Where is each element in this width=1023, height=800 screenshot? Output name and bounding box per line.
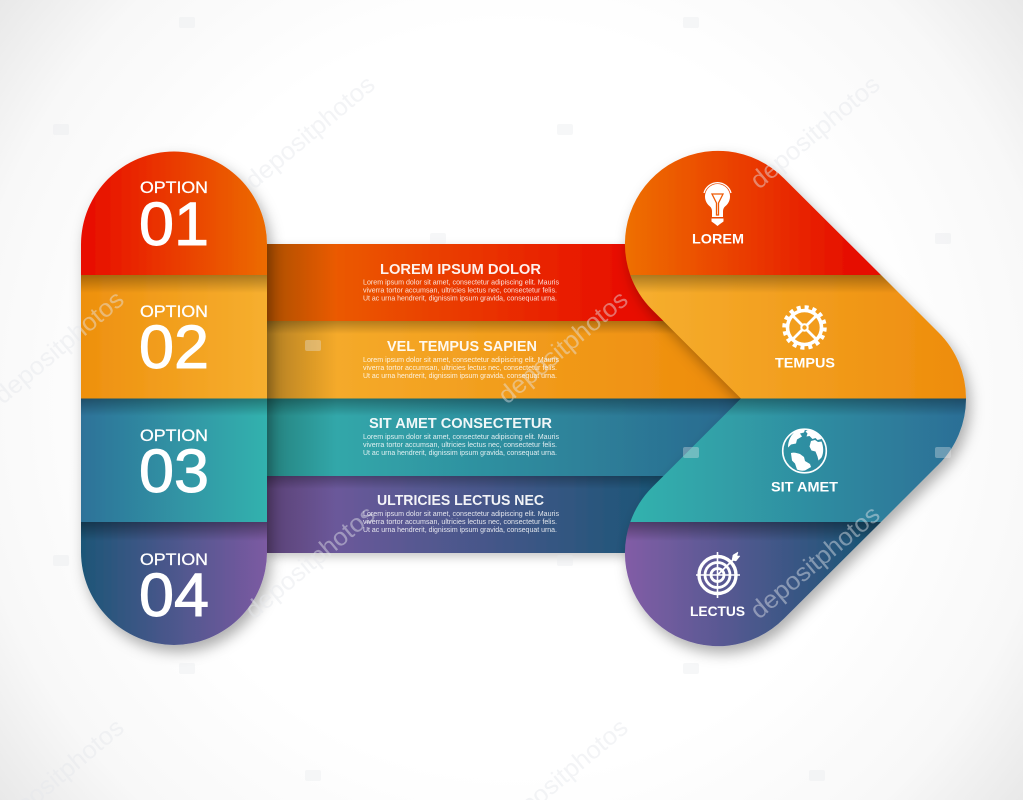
block 1 text: viverra tortor accumsan, ultricies lectus nec, consectetur felis.	[363, 288, 557, 294]
band shading	[267, 244, 757, 553]
pill shading	[81, 275, 267, 541]
block 2 text: viverra tortor accumsan, ultricies lectus nec, consectetur felis.	[363, 365, 557, 372]
panel: centre text bands	[267, 244, 757, 553]
block 3 text: SIT AMET CONSECTETUR	[369, 416, 553, 432]
block 3 text	[363, 416, 560, 457]
label tempus: TEMPUS	[775, 354, 835, 370]
icon: globe	[783, 429, 826, 473]
block 1 text	[363, 262, 560, 302]
block 4 text	[363, 493, 560, 534]
block 4 text: viverra tortor accumsan, ultricies lectus nec, consectetur felis.	[363, 519, 557, 526]
label lorem: LOREM	[692, 230, 744, 246]
arrow head segments	[625, 151, 966, 646]
watermarks: depositphotos	[240, 70, 380, 195]
panel: option pill	[81, 152, 267, 645]
block 3 text: viverra tortor accumsan, ultricies lectus nec, consectetur felis.	[363, 442, 557, 449]
option 02 label: 02	[139, 313, 209, 381]
block 3 text: Lorem ipsum dolor sit amet, consectetur adipiscing elit. Mauris	[363, 434, 560, 441]
block 1 text: LOREM IPSUM DOLOR	[380, 262, 542, 278]
block 4 text: Lorem ipsum dolor sit amet, consectetur adipiscing elit. Mauris	[363, 511, 560, 518]
block 4 text: Ut ac urna hendrerit, dignissim ipsum gravida, consequat urna.	[363, 527, 557, 534]
option 02 label: OPTION	[140, 303, 208, 321]
icon: target	[696, 552, 740, 598]
option 01 label: OPTION	[140, 179, 208, 197]
pill segments	[81, 152, 267, 645]
block 2 text: VEL TEMPUS SAPIEN	[387, 339, 537, 355]
block 2 text	[363, 339, 560, 380]
option 03 label: OPTION	[140, 427, 208, 445]
panel: arrow head	[620, 151, 970, 646]
block 4 text: ULTRICIES LECTUS NEC	[377, 493, 545, 509]
option 01 label: 01	[139, 190, 209, 258]
option 04 label: 04	[139, 561, 209, 629]
label lectus: LECTUS	[690, 603, 745, 619]
watermarks: depositphotos	[240, 500, 380, 625]
block 1 text: Ut ac urna hendrerit, dignissim ipsum gravida, consequat urna.	[363, 296, 557, 302]
watermarks: depositphotos	[745, 70, 885, 195]
option 04 label: OPTION	[140, 551, 208, 569]
block 2 text: Lorem ipsum dolor sit amet, consectetur adipiscing elit. Mauris	[363, 357, 560, 364]
block 1 text: Lorem ipsum dolor sit amet, consectetur adipiscing elit. Mauris	[363, 280, 560, 286]
band fills	[267, 244, 757, 553]
segment shading	[620, 275, 970, 541]
block 2 text: Ut ac urna hendrerit, dignissim ipsum gravida, consequat urna.	[363, 373, 557, 380]
icon: light bulb	[704, 183, 731, 226]
watermarks: depositphotos	[745, 500, 885, 625]
label sit amet: SIT AMET	[771, 478, 838, 494]
icon: gear	[784, 308, 824, 348]
option 03 label: 03	[139, 437, 209, 505]
watermarks: depositphotos	[493, 285, 633, 410]
block 3 text: Ut ac urna hendrerit, dignissim ipsum gravida, consequat urna.	[363, 450, 557, 457]
